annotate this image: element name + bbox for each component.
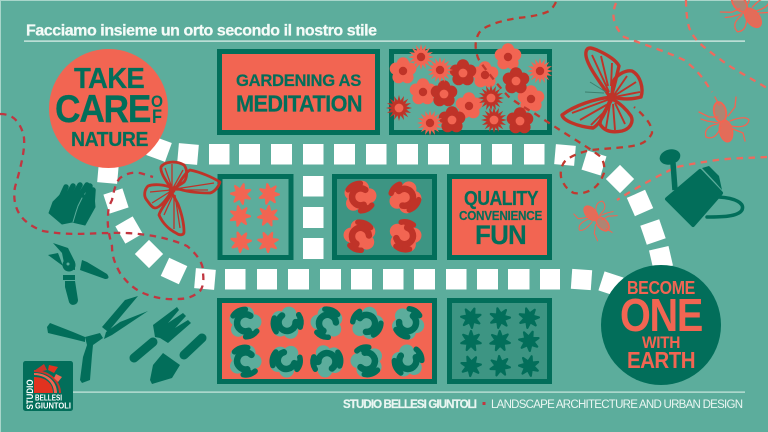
logo [23,361,73,411]
dashed flight path: upper bee [613,3,712,92]
icon: hand fork [134,307,191,358]
circle: take care of nature [49,49,168,168]
footer text: tagline: LANDSCAPE ARCHITECTURE AND URBAN DESIGN [491,399,743,411]
dashed flight path: right bee [686,0,767,88]
heading: meditation: MEDITATION [236,90,362,116]
heading: one: ONE [620,289,702,341]
panel: row of teal roses [220,300,434,383]
heading: care: CARE [55,88,151,131]
logo text: bellesi: BELLESI [35,392,62,402]
icon: pruning secateurs [48,243,108,305]
stepping stone path [97,136,673,297]
icon: hand trowel [150,338,202,384]
logo text: giuntoli: GIUNTOLI [35,400,71,410]
footer text: studio name: STUDIO BELLESI GIUNTOLI [343,399,477,411]
dashed flight path: left butterfly [0,114,203,299]
icon: small butterfly [145,162,220,235]
panel: gardening as meditation [220,52,378,132]
icon: bee lower [570,194,623,246]
heading: nature: NATURE [71,129,148,151]
icon: bee top right [714,0,768,40]
panel: flower bed [386,43,553,136]
heading: quality: QUALITY [464,187,539,210]
dashed flight path: lower bee [617,157,767,200]
heading: of: O [151,92,163,111]
panel: four roses [334,176,434,259]
heading: take: TAKE [74,63,144,95]
footer [73,392,745,411]
logo text: studio: STUDIO [25,380,35,410]
panel: green plants [450,300,550,382]
heading: earth: EARTH [627,347,695,373]
footer separator dot [482,402,486,405]
icon: garden shears [47,296,148,383]
heading: gardening as: GARDENING AS [236,71,361,90]
title: Facciamo insieme un orto secondo il nostro stile [26,22,377,40]
panel: quality convenience fun [450,176,550,258]
heading: fun: FUN [475,220,526,250]
panel: small coral plants [220,176,291,258]
icon: bee right [699,97,749,143]
heading: become: BECOME [627,277,695,298]
icon: large butterfly [562,48,642,132]
icon: watering can [658,147,743,225]
heading: with: WITH [642,334,680,352]
heading: convenience: CONVENIENCE [459,208,543,223]
circle: become one with earth [601,265,721,385]
icon: gardening gloves [49,185,95,225]
dashed flight path: right butterfly [476,2,652,193]
circle: take care of nature: F [152,107,162,128]
